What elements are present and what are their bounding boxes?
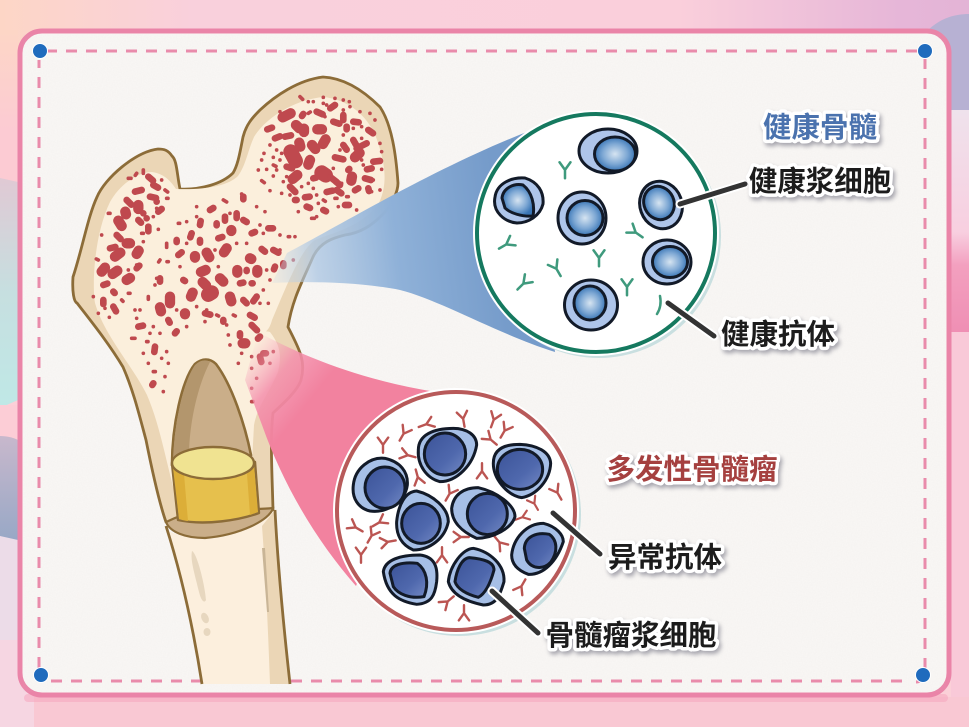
label: healthy plasma cells: 健康浆细胞 xyxy=(749,166,891,198)
icon: corner pin bottom left xyxy=(34,668,48,682)
bone shaft xyxy=(166,510,290,684)
bone shaft: outlines xyxy=(166,510,290,684)
icon: corner pin top left xyxy=(32,44,48,58)
bone upper: outer cortical layer xyxy=(73,77,398,522)
beam: pink projection to myeloma marrow xyxy=(245,332,436,586)
yellow marrow cylinder xyxy=(172,447,259,522)
label: abnormal antibodies: 异常抗体 xyxy=(608,542,722,574)
label: myeloma plasma cells: 骨髓瘤浆细胞 xyxy=(545,620,717,652)
bone illustration xyxy=(73,77,398,684)
panel: healthy marrow circle xyxy=(473,110,721,358)
bone cavity: darker inner band xyxy=(173,360,210,462)
leader lines xyxy=(492,184,745,633)
bone shaft marks xyxy=(192,548,269,636)
icon: corner pin bottom right xyxy=(916,668,930,682)
icon: corner pin top right xyxy=(918,44,932,58)
panel: myeloma marrow circle xyxy=(333,388,581,636)
antibodies: abnormal xyxy=(347,411,566,620)
cells: myeloma plasma cells xyxy=(353,428,563,605)
trabeculae: marrow blobs xyxy=(93,97,382,402)
bone shaft: tan side band xyxy=(262,510,290,684)
heading: multiple myeloma: 多发性骨髓瘤 xyxy=(606,454,778,486)
bone upper: cream spongy layer xyxy=(94,97,385,510)
bone cut collar xyxy=(166,508,273,538)
cells: healthy plasma cells xyxy=(495,129,691,330)
heading: healthy marrow: 健康骨髓 xyxy=(763,112,877,144)
bone cavity: medullary arch xyxy=(172,360,251,480)
antibodies: healthy xyxy=(496,162,661,314)
label: healthy antibodies: 健康抗体 xyxy=(721,319,835,351)
beam: blue projection to healthy marrow xyxy=(272,130,555,352)
